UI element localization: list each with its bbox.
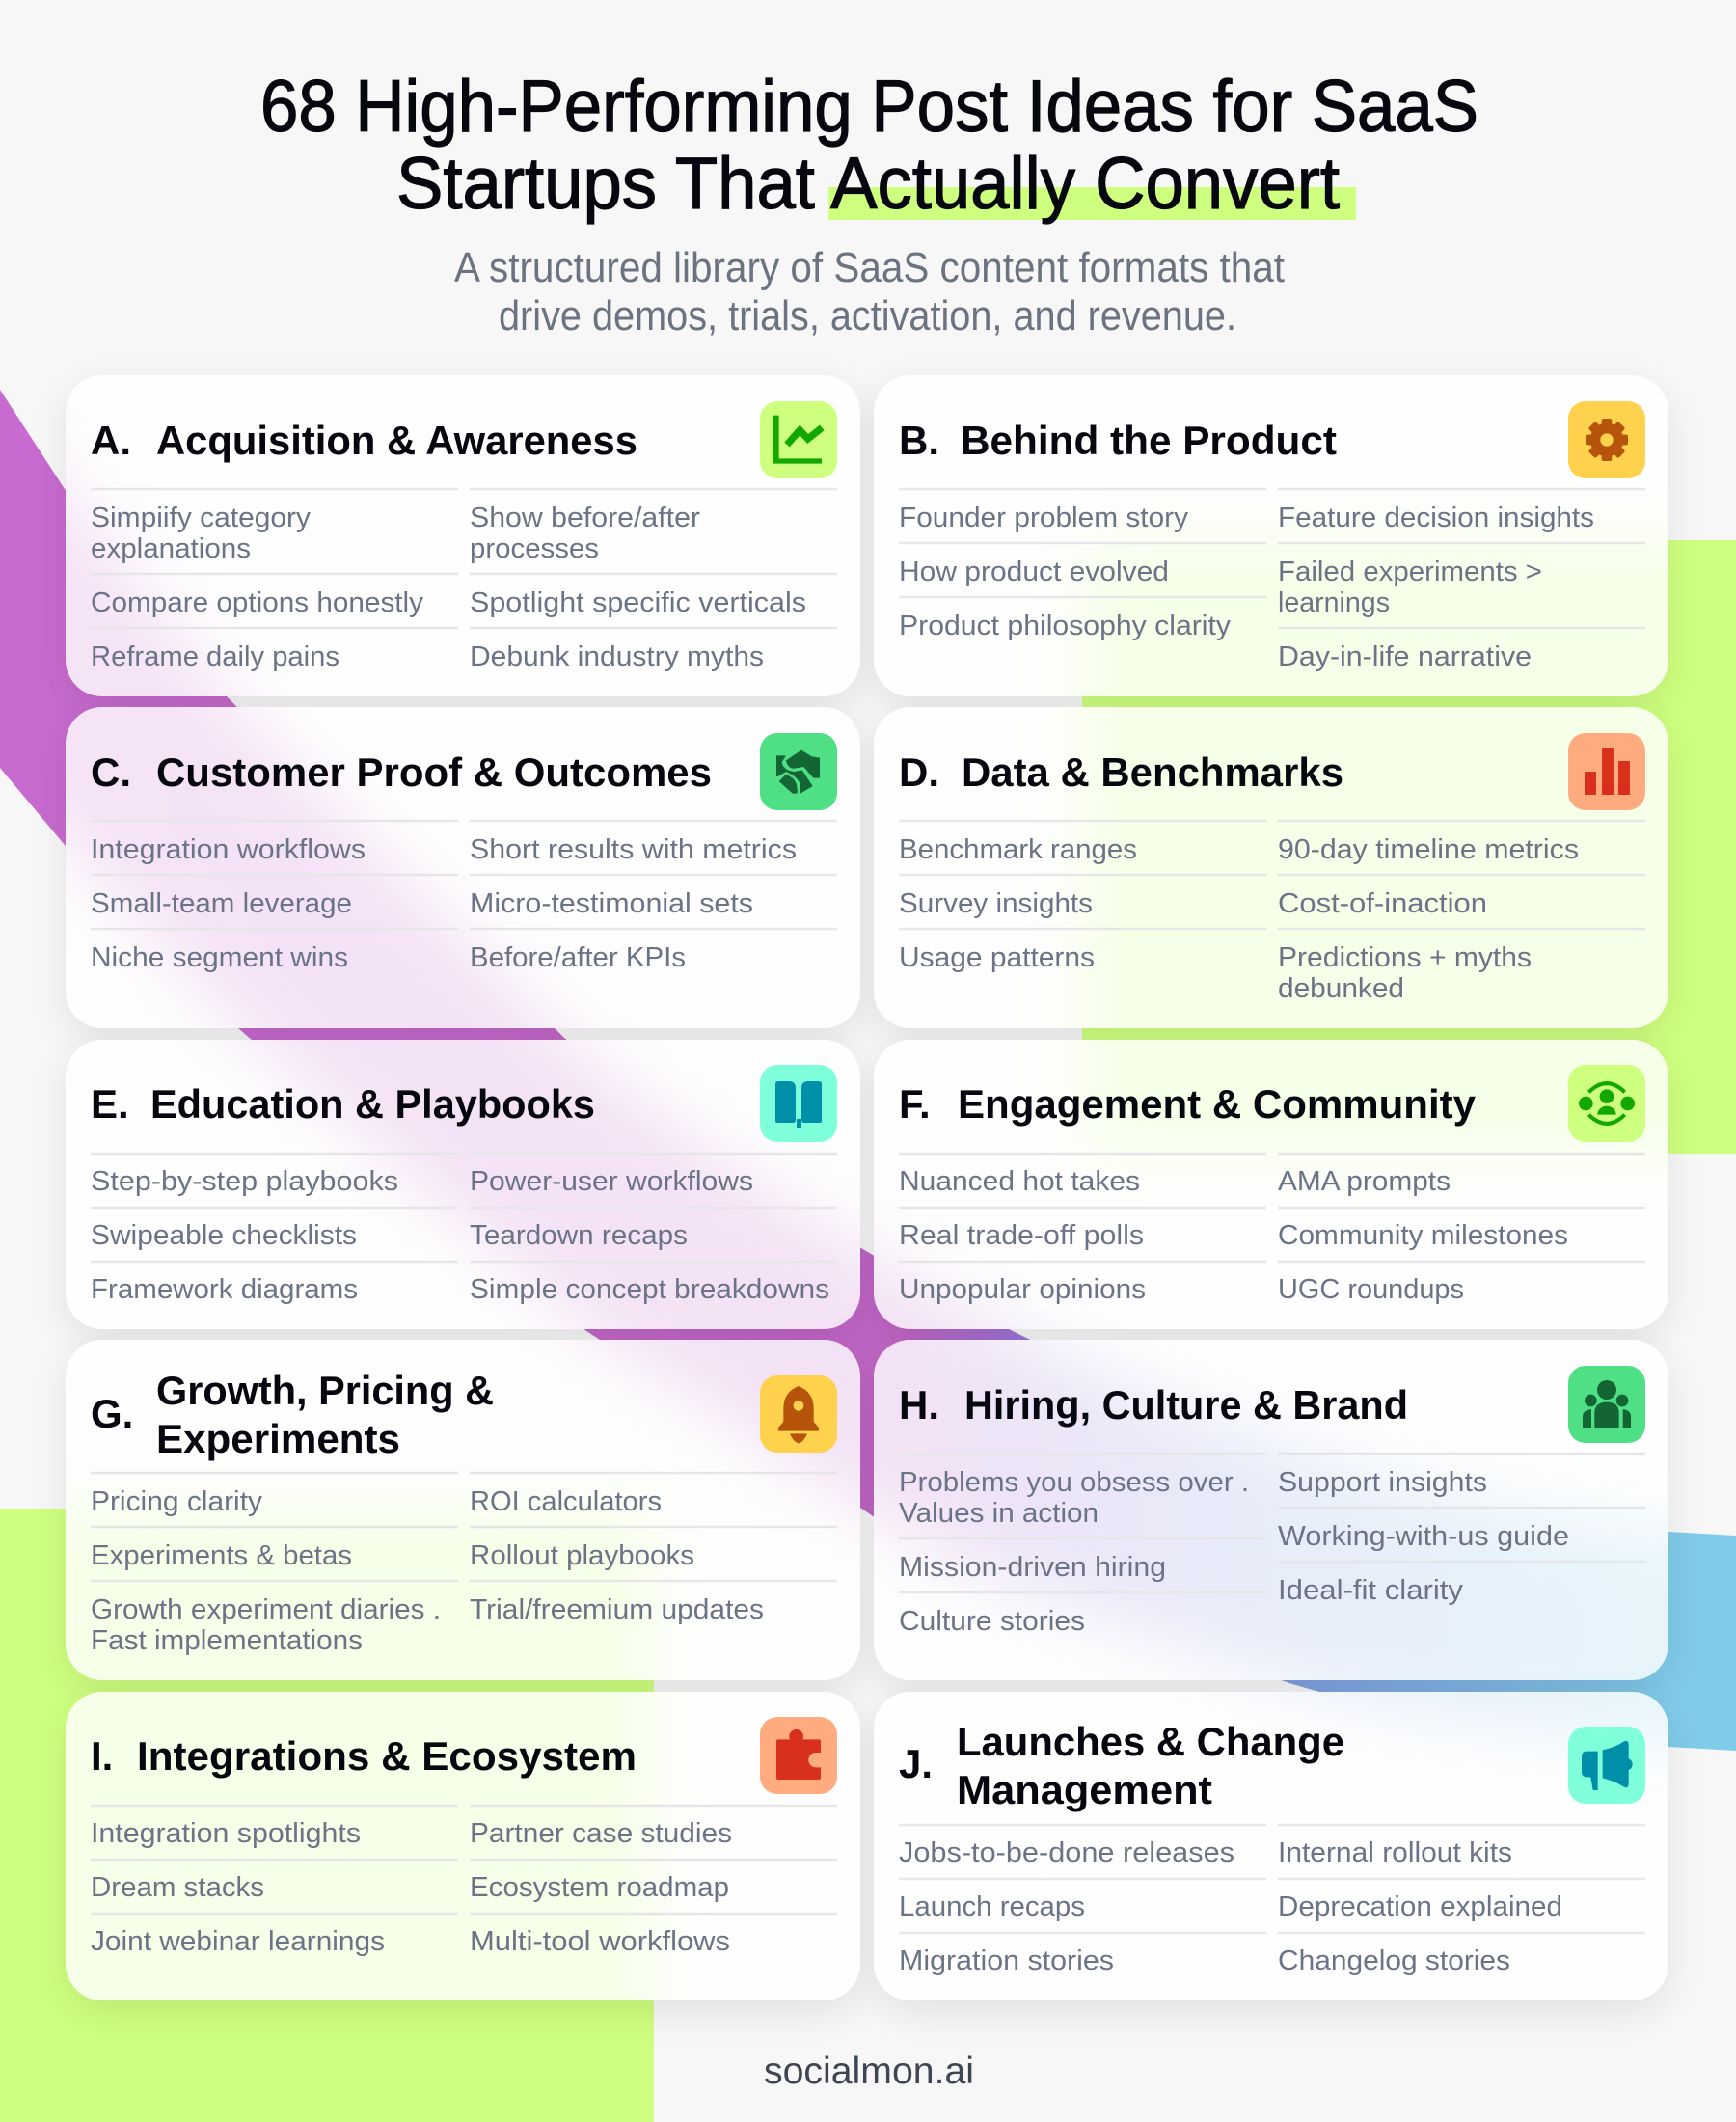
heading: B: B. bbox=[899, 418, 939, 463]
list: J right column: Deprecation explained bbox=[1278, 1891, 1562, 1922]
list: B right column bbox=[1278, 503, 1594, 672]
heading: G: Experiments bbox=[156, 1416, 400, 1461]
icon: rocket bbox=[760, 1375, 837, 1453]
frosted card backdrops bbox=[66, 399, 1668, 2000]
list: G left column: Growth experiment diaries . bbox=[91, 1594, 441, 1625]
list: I left column: Dream stacks bbox=[91, 1872, 264, 1903]
title: Startups That Actually Convert bbox=[396, 143, 1340, 225]
list: G left column: Fast implementations bbox=[91, 1625, 363, 1656]
heading: A: Acquisition & Awareness bbox=[156, 418, 637, 463]
list: J right column: Changelog stories bbox=[1278, 1945, 1510, 1976]
panel: H. Hiring, Culture & Brand bbox=[899, 1366, 1645, 1637]
panel: A. Acquisition & Awareness bbox=[91, 401, 837, 672]
list: E left column: Step-by-step playbooks bbox=[91, 1166, 398, 1197]
heading: J: J. bbox=[899, 1741, 933, 1786]
list: J right column bbox=[1278, 1837, 1562, 1976]
panel: J. Launches & Change Management bbox=[899, 1719, 1645, 1976]
list: A left column: explanations bbox=[91, 533, 251, 564]
list: E right column: Teardown recaps bbox=[470, 1220, 688, 1251]
list: H left column bbox=[899, 1467, 1249, 1637]
list: H left column: Mission-driven hiring bbox=[899, 1552, 1166, 1583]
icon: bar chart bbox=[1568, 733, 1645, 810]
heading: C: Customer Proof & Outcomes bbox=[156, 749, 712, 795]
list: G right column: Trial/freemium updates bbox=[470, 1594, 764, 1625]
heading: E: Education & Playbooks bbox=[150, 1081, 595, 1127]
title: 68 High-Performing Post Ideas for SaaS bbox=[260, 66, 1478, 148]
list: A right column bbox=[470, 503, 806, 672]
heading: A: A. bbox=[91, 418, 131, 463]
heading: D: D. bbox=[899, 749, 939, 795]
heading: E: E. bbox=[91, 1081, 129, 1127]
list: C left column: Small-team leverage bbox=[91, 888, 352, 919]
heading: B: Behind the Product bbox=[961, 418, 1337, 463]
icon: community bbox=[1568, 1065, 1645, 1142]
list: I left column: Joint webinar learnings bbox=[91, 1926, 385, 1957]
icon: gear bbox=[1568, 401, 1645, 478]
list: F right column: AMA prompts bbox=[1278, 1166, 1451, 1197]
list: A left column bbox=[91, 503, 424, 672]
list: H right column bbox=[1278, 1467, 1569, 1606]
list: A right column: Spotlight specific verticals bbox=[470, 587, 806, 618]
subtitle bbox=[454, 244, 1285, 340]
list: A right column: Debunk industry myths bbox=[470, 641, 764, 672]
list: E left column: Swipeable checklists bbox=[91, 1220, 357, 1251]
list: D right column: debunked bbox=[1278, 973, 1404, 1004]
heading: D: Data & Benchmarks bbox=[962, 749, 1343, 795]
list: J right column: Internal rollout kits bbox=[1278, 1837, 1512, 1868]
list: F left column: Real trade-off polls bbox=[899, 1220, 1144, 1251]
heading: G bbox=[91, 1368, 494, 1461]
panel: C. Customer Proof & Outcomes bbox=[91, 733, 837, 973]
list: B left column: How product evolved bbox=[899, 557, 1169, 587]
list: E right column bbox=[470, 1166, 829, 1305]
list: C right column: Short results with metrics bbox=[470, 834, 797, 865]
list: A left column: Simpiify category bbox=[91, 503, 312, 533]
list: G left column: Experiments & betas bbox=[91, 1540, 352, 1571]
list: I left column: Integration spotlights bbox=[91, 1818, 361, 1849]
heading: G: Growth, Pricing & bbox=[156, 1368, 494, 1413]
heading: F: Engagement & Community bbox=[958, 1081, 1477, 1127]
list: I right column: Multi-tool workflows bbox=[470, 1926, 730, 1957]
list: C left column bbox=[91, 834, 366, 973]
list: F left column: Nuanced hot takes bbox=[899, 1166, 1140, 1197]
list: D right column: 90-day timeline metrics bbox=[1278, 834, 1579, 865]
list: D left column bbox=[899, 834, 1137, 973]
list: A left column: Reframe daily pains bbox=[91, 641, 339, 672]
list: C left column: Niche segment wins bbox=[91, 942, 348, 973]
list: A right column: processes bbox=[470, 533, 599, 564]
list: G right column: Rollout playbooks bbox=[470, 1540, 694, 1571]
list: G right column: ROI calculators bbox=[470, 1486, 662, 1517]
heading: I: I. bbox=[91, 1733, 113, 1779]
heading: H: Hiring, Culture & Brand bbox=[964, 1382, 1408, 1428]
list: B left column bbox=[899, 503, 1232, 641]
list: B right column: Day-in-life narrative bbox=[1278, 641, 1532, 672]
heading: I: Integrations & Ecosystem bbox=[137, 1733, 637, 1779]
list: H left column: Problems you obsess over . bbox=[899, 1467, 1249, 1498]
list: C right column: Micro-testimonial sets bbox=[470, 888, 753, 919]
panel: F. Engagement & Community bbox=[899, 1065, 1645, 1305]
panel: G. Growth, Pricing & Experiments bbox=[91, 1368, 837, 1656]
list: H left column: Culture stories bbox=[899, 1606, 1085, 1637]
panel: D. Data & Benchmarks bbox=[899, 733, 1645, 1004]
list: D right column bbox=[1278, 834, 1579, 1004]
list: H left column: Values in action bbox=[899, 1498, 1099, 1529]
list: J left column: Launch recaps bbox=[899, 1891, 1085, 1922]
list: C right column bbox=[470, 834, 797, 973]
list: B left column: Founder problem story bbox=[899, 503, 1189, 533]
list: D right column: Cost-of-inaction bbox=[1278, 888, 1487, 919]
panel: E. Education & Playbooks bbox=[91, 1065, 837, 1305]
list: D right column: Predictions + myths bbox=[1278, 942, 1532, 973]
heading: F: F. bbox=[899, 1081, 931, 1127]
icon: megaphone bbox=[1568, 1727, 1645, 1804]
list: F right column bbox=[1278, 1166, 1568, 1305]
list: A left column: Compare options honestly bbox=[91, 587, 424, 618]
list: F right column: UGC roundups bbox=[1278, 1274, 1464, 1305]
list: B right column: learnings bbox=[1278, 587, 1390, 618]
heading: C: C. bbox=[91, 749, 131, 795]
list: E left column bbox=[91, 1166, 398, 1305]
icon: team bbox=[1568, 1366, 1645, 1443]
list: E left column: Framework diagrams bbox=[91, 1274, 358, 1305]
list: E right column: Simple concept breakdowns bbox=[470, 1274, 829, 1305]
icon: handshake bbox=[760, 733, 837, 810]
list: D left column: Benchmark ranges bbox=[899, 834, 1137, 865]
list: H right column: Ideal-fit clarity bbox=[1278, 1575, 1464, 1606]
list: F left column: Unpopular opinions bbox=[899, 1274, 1146, 1305]
list: G left column: Pricing clarity bbox=[91, 1486, 263, 1517]
heading: J: Launches & Change bbox=[957, 1719, 1344, 1764]
title bbox=[260, 66, 1478, 225]
list: G right column bbox=[470, 1486, 764, 1625]
list: D left column: Survey insights bbox=[899, 888, 1093, 919]
list: F right column: Community milestones bbox=[1278, 1220, 1568, 1251]
list: J left column bbox=[899, 1837, 1234, 1976]
list: A right column: Show before/after bbox=[470, 503, 700, 533]
panel: B. Behind the Product bbox=[899, 401, 1645, 672]
panel: I. Integrations & Ecosystem bbox=[91, 1717, 837, 1957]
list: B right column: Failed experiments > bbox=[1278, 557, 1542, 587]
list: D left column: Usage patterns bbox=[899, 942, 1095, 973]
list: J left column: Migration stories bbox=[899, 1945, 1114, 1976]
heading: H: H. bbox=[899, 1382, 939, 1428]
list: I right column bbox=[470, 1818, 732, 1957]
list: E right column: Power-user workflows bbox=[470, 1166, 753, 1197]
list: I left column bbox=[91, 1818, 385, 1957]
list: H right column: Support insights bbox=[1278, 1467, 1487, 1498]
icon: line chart bbox=[760, 401, 837, 478]
list: B right column: Feature decision insights bbox=[1278, 503, 1594, 533]
list: C right column: Before/after KPIs bbox=[470, 942, 686, 973]
heading: J bbox=[899, 1719, 1344, 1812]
heading: J: Management bbox=[957, 1767, 1212, 1812]
list: J left column: Jobs-to-be-done releases bbox=[899, 1837, 1234, 1868]
list: I right column: Partner case studies bbox=[470, 1818, 732, 1849]
icon: puzzle piece bbox=[760, 1717, 837, 1794]
heading: G: G. bbox=[91, 1391, 133, 1436]
subtitle: A structured library of SaaS content formats that bbox=[454, 244, 1285, 291]
subtitle: drive demos, trials, activation, and revenue. bbox=[499, 292, 1236, 340]
list: I right column: Ecosystem roadmap bbox=[470, 1872, 729, 1903]
list: H right column: Working-with-us guide bbox=[1278, 1521, 1569, 1552]
list: B left column: Product philosophy clarity bbox=[899, 611, 1232, 641]
icon: open book bbox=[760, 1065, 837, 1142]
list: C left column: Integration workflows bbox=[91, 834, 366, 865]
list: G left column bbox=[91, 1486, 441, 1656]
footer: socialmon.ai: socialmon.ai bbox=[764, 2051, 974, 2092]
list: F left column bbox=[899, 1166, 1146, 1305]
